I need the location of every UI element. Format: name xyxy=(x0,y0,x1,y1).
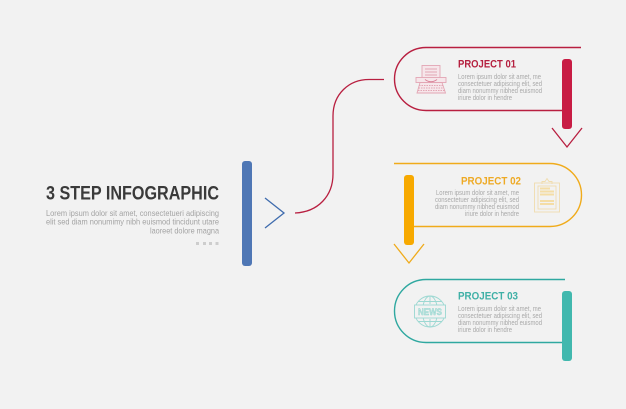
intro text block: elit sed diam nonumimy nibh euismod tincidunt utare xyxy=(46,217,219,227)
panel 03 text: Lorem ipsum dolor sit amet, me xyxy=(458,305,541,313)
panel 03 text: iriure dolor in hendre xyxy=(458,326,512,334)
panel 02 heading: PROJECT 02 xyxy=(461,176,521,188)
panel 01 arrow xyxy=(552,128,582,147)
panel 03 text xyxy=(458,305,542,334)
panel 02 text: iriure dolor in hendre xyxy=(465,210,519,218)
panel 01 bar xyxy=(562,59,572,129)
panel: project 01 xyxy=(395,48,582,147)
blue vertical bar xyxy=(242,161,252,266)
panel 01 outline xyxy=(395,48,581,110)
intro text block: laoreet dolore magna xyxy=(150,225,219,235)
panel 03 text: diam nonummy nibhed euismod xyxy=(458,319,542,327)
panel 02 text: Lorem ipsum dolor sit amet, me xyxy=(436,189,519,197)
intro text block xyxy=(46,208,219,235)
panel: project 02 xyxy=(394,164,582,263)
panel: project 03 xyxy=(395,280,572,361)
panel 03 text: consectetuer adipiscing elit, sed xyxy=(458,312,542,320)
panel 01 text: diam nonummy nibhed euismod xyxy=(458,87,542,95)
panel 01 heading: PROJECT 01 xyxy=(458,58,516,70)
icon: typewriter xyxy=(416,66,446,93)
panel 03 heading: PROJECT 03 xyxy=(458,290,518,302)
panel 02 bar xyxy=(404,175,414,245)
connector line xyxy=(295,80,384,213)
panel 01 text: consectetuer adipiscing elit, sed xyxy=(458,80,542,88)
panel 01 text: Lorem ipsum dolor sit amet, me xyxy=(458,73,541,81)
intro text block: Lorem ipsum dolor sit amet, consectetueri adipiscing xyxy=(46,208,219,218)
panel 03 outline xyxy=(395,280,565,342)
panel 02 text xyxy=(435,189,519,218)
icon: news globe xyxy=(414,296,446,327)
panel 03 bar xyxy=(562,291,572,361)
panel 02 text: consectetuer adipiscing elit, sed xyxy=(435,196,519,204)
panel 02 text: diam nonummy nibhed euismod xyxy=(435,203,519,211)
blue chevron arrow xyxy=(265,198,284,228)
panel 01 text: iriure dolor in hendre xyxy=(458,94,512,102)
title: 3 STEP INFOGRAPHIC xyxy=(46,184,219,204)
panel 02 outline xyxy=(394,164,582,226)
panel 02 arrow xyxy=(394,244,424,263)
icon: news globe: NEWS xyxy=(418,307,442,317)
dots ornament xyxy=(196,242,218,245)
icon: clipboard xyxy=(534,178,560,212)
panel 01 text xyxy=(458,73,542,102)
